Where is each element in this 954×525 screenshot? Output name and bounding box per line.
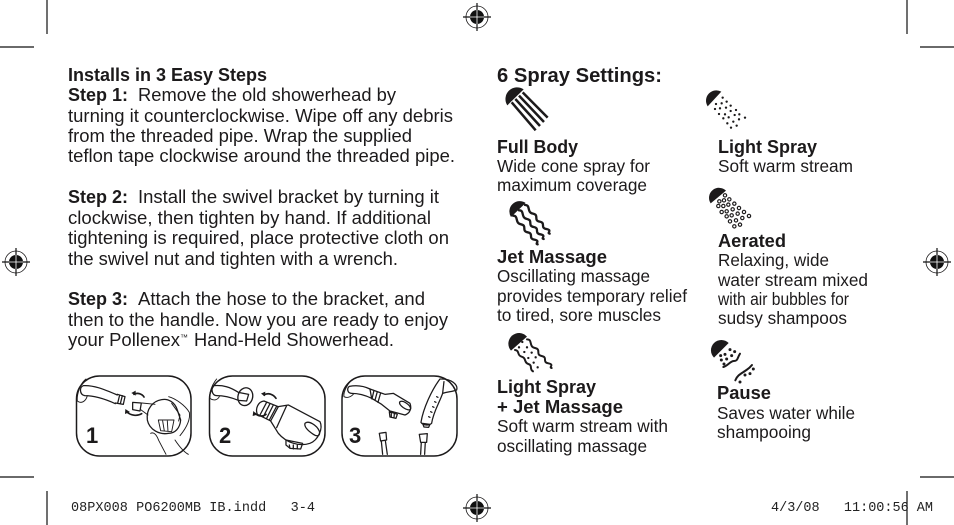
step 1 text: Remove the old showerhead by bbox=[138, 84, 397, 105]
setting: aerated: water stream mixed bbox=[717, 270, 868, 290]
step 2 text: Install the swivel bracket by turning it bbox=[138, 186, 440, 207]
setting: full body: Full Body bbox=[497, 136, 579, 157]
step 2 text: the swivel nut and tighten with a wrench. bbox=[68, 248, 398, 269]
setting: aerated bbox=[709, 188, 868, 328]
setting: light spray plus jet massage: oscillating massage bbox=[497, 436, 647, 456]
setting: light spray: Soft warm stream bbox=[718, 156, 853, 176]
setting: light spray: Light Spray bbox=[718, 136, 818, 157]
setting: full body: maximum coverage bbox=[497, 175, 647, 195]
step 2 text bbox=[68, 186, 449, 269]
setting: full body bbox=[497, 87, 650, 195]
step 3 text: your Pollenex bbox=[68, 329, 181, 350]
icon: full body spray bbox=[505, 87, 548, 130]
installation instructions bbox=[68, 64, 455, 350]
footer: date and time: 4/3/08 11:00:56 AM bbox=[771, 501, 933, 516]
setting: pause bbox=[711, 340, 855, 442]
step 3 text: Step 3: bbox=[68, 288, 128, 309]
step 1 text bbox=[68, 84, 455, 166]
icon: pause spray bbox=[711, 340, 755, 383]
setting: full body: Wide cone spray for bbox=[497, 156, 650, 176]
step 1 text: teflon tape clockwise around the threaded pipe. bbox=[68, 145, 455, 166]
footer: file slug: 08PX008 PO6200MB IB.indd 3-4 bbox=[71, 501, 315, 516]
icon: jet massage spray bbox=[509, 201, 550, 244]
setting: jet massage: provides temporary relief bbox=[497, 286, 687, 306]
illustration panel 3 bbox=[342, 376, 457, 456]
heading: installs in 3 easy steps: Installs in 3 Easy Steps bbox=[68, 64, 267, 85]
setting: jet massage: Jet Massage bbox=[497, 246, 607, 267]
heading: 6 spray settings: 6 Spray Settings: bbox=[497, 64, 662, 87]
step 3 text: Hand-Held Showerhead. bbox=[194, 329, 394, 350]
setting: aerated: Aerated bbox=[718, 230, 786, 251]
step 2 text: clockwise, then tighten by hand. If additional bbox=[68, 207, 431, 228]
setting: aerated: sudsy shampoos bbox=[718, 308, 847, 328]
illustration panel 1 bbox=[76, 376, 191, 456]
step 1 text: Step 1: bbox=[68, 84, 128, 105]
step 3 text: Attach the hose to the bracket, and bbox=[138, 288, 425, 309]
setting: pause: Pause bbox=[717, 382, 771, 403]
setting: aerated: Relaxing, wide bbox=[718, 250, 829, 270]
illustration panel 3: 3 bbox=[349, 423, 361, 448]
step 1 text: from the threaded pipe. Wrap the supplied bbox=[68, 125, 412, 146]
step 3 text bbox=[68, 288, 449, 350]
step 2 text: Step 2: bbox=[68, 186, 128, 207]
setting: light spray plus jet massage bbox=[497, 333, 668, 456]
setting: light spray bbox=[706, 90, 853, 176]
setting: pause: Saves water while bbox=[717, 403, 855, 423]
icon: light spray bbox=[706, 90, 746, 129]
setting: jet massage: Oscillating massage bbox=[497, 266, 650, 286]
icon: light spray and jet massage bbox=[508, 333, 552, 371]
illustration panel 2 bbox=[210, 376, 325, 456]
setting: light spray plus jet massage: Soft warm stream with bbox=[497, 416, 668, 436]
icon: aerated spray bbox=[709, 188, 751, 228]
spray settings section bbox=[497, 64, 868, 456]
illustration panel 1: 1 bbox=[86, 423, 98, 448]
setting: light spray plus jet massage: + Jet Massage bbox=[497, 396, 623, 417]
setting: jet massage: to tired, sore muscles bbox=[497, 305, 661, 325]
setting: jet massage bbox=[497, 201, 687, 325]
setting: light spray plus jet massage: Light Spray bbox=[497, 376, 597, 397]
illustration panel 2: 2 bbox=[219, 423, 231, 448]
step 3 text: ™ bbox=[180, 333, 188, 342]
step 2 text: tightening is required, place protective cloth on bbox=[68, 227, 449, 248]
step 3 text: then to the handle. Now you are ready to enjoy bbox=[68, 309, 449, 330]
setting: pause: shampooing bbox=[717, 422, 811, 442]
setting: aerated: with air bubbles for bbox=[717, 289, 849, 309]
step 1 text: turning it counterclockwise. Wipe off any debris bbox=[68, 105, 453, 126]
